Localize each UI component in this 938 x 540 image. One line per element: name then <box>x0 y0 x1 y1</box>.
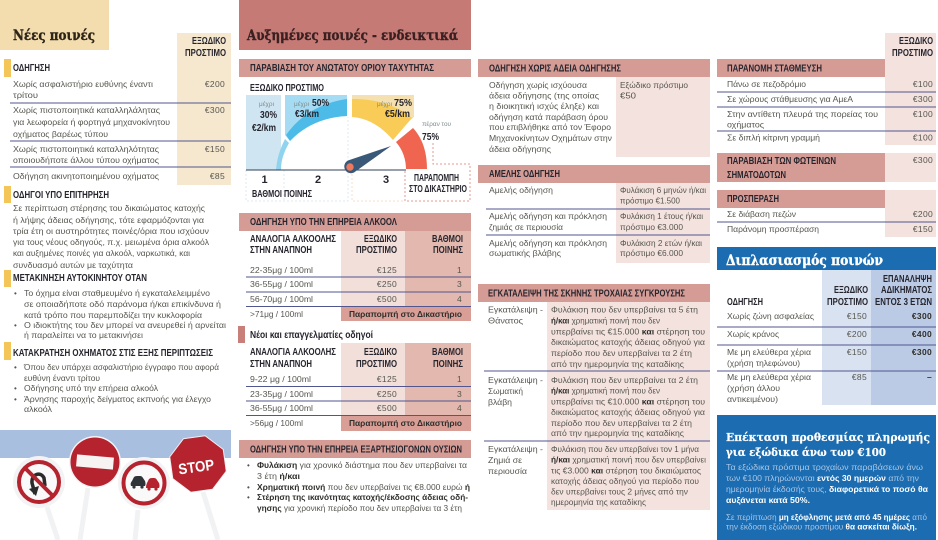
panel: leaving the scene of a collision: βλάβη <box>488 398 512 407</box>
section: driving: €300 <box>205 105 225 115</box>
table: alcohol penalties: ΠΡΟΣΤΙΜΟ <box>356 245 397 256</box>
table: repeat offences: αντικειμένου) <box>727 395 778 404</box>
icon: stop sign <box>168 434 228 494</box>
table: alcohol penalties: €500 <box>377 294 397 304</box>
panel: careless driving: ζημιάς σε περιουσία <box>489 223 563 232</box>
section: driving: €150 <box>205 144 225 154</box>
section: driving: ΟΔΗΓΗΣΗ <box>13 63 50 74</box>
chart: speed gauge: 2 <box>315 174 321 186</box>
text block: drug penalties: Φυλάκιση για χρονικό διάστημα που δεν υπερβαίνει τα <box>257 461 467 470</box>
chart: speed gauge: 1 <box>261 174 268 186</box>
panel: illegal parking, traffic lights, overtaking: ΣΗΜΑΤΟΔΟΤΩΝ <box>727 170 786 181</box>
text block: drug penalties: Στέρηση της ικανότητας κατοχής/έκδοσης άδειας οδή- <box>257 493 468 502</box>
table: alcohol penalties: ΣΤΗΝ ΑΝΑΠΝΟΗ <box>250 245 312 256</box>
chart: speed gauge: ΠΑΡΑΠΟΜΠΗ <box>414 173 459 184</box>
icon: no overtaking sign <box>118 457 170 509</box>
table: repeat offences <box>717 270 936 405</box>
panel: driving without licence: άδεια οδήγησης (της οποίας <box>489 92 599 100</box>
text block: drug penalties: γησης για χρονική περίοδο που δεν υπερβαίνει τα 3 έτη <box>257 504 462 513</box>
table: alcohol penalties: 56-70μg / 100ml <box>250 295 313 304</box>
panel: leaving the scene of a collision: Θάνατος <box>488 316 523 326</box>
icon: no U-turn sign <box>13 456 65 508</box>
callout: payment deadline extension: Επέκταση προθεσμίας πληρωμής <box>726 430 930 444</box>
table: repeat offences: Με μη ελεύθερα χέρια <box>727 348 811 357</box>
section: vehicle impoundment: αλκοόλ <box>24 405 52 414</box>
panel: driving without licence: άδεια οδήγησης <box>489 145 551 154</box>
panel: careless driving: ΑΜΕΛΗΣ ΟΔΗΓΗΣΗ <box>489 169 560 180</box>
title: new penalties: Νέες ποινές <box>13 28 95 44</box>
panel: illegal parking, traffic lights, overtaking: ΠΑΡΑΒΙΑΣΗ ΤΩΝ ΦΩΤΕΙΝΩΝ <box>727 156 836 167</box>
text block: drug penalties: • <box>247 461 250 470</box>
heading: driving under alcohol <box>239 213 471 231</box>
chart: speed gauge <box>246 83 470 201</box>
callout: payment deadline extension: ημερομηνία έκδοσής τους, διαφορετικά το ποσό θα <box>726 485 928 494</box>
chart: speed gauge: €2/km <box>252 123 276 134</box>
table: repeat offences: ΟΔΗΓΗΣΗ <box>727 297 763 308</box>
table: alcohol penalties for new drivers: 36-55μg / 100ml <box>250 404 313 413</box>
section: vehicle removal: Ο ιδιοκτήτης του δεν μπορεί να ανευρεθεί ή αρνείται <box>24 321 226 330</box>
table: alcohol penalties: €125 <box>377 265 397 275</box>
table: alcohol penalties for new drivers: 9-22 μg / 100ml <box>250 375 311 384</box>
panel: leaving the scene of a collision <box>478 284 710 510</box>
chart: speed gauge: πέραν του <box>422 120 451 128</box>
panel: careless driving: πρόστιμο €1.500 <box>620 196 681 206</box>
chart: speed gauge: 75% <box>422 132 439 143</box>
chart: speed gauge: €3/km <box>295 109 319 120</box>
panel: leaving the scene of a collision: δικαιώματος κατοχής άδειας οδηγού για <box>551 408 705 417</box>
heading: driving under drugs: ΟΔΗΓΗΣΗ ΥΠΟ ΤΗΝ ΕΠΗΡΕΙΑ ΕΞΑΡΤΗΣΙΟΓΟΝΩΝ ΟΥΣΙΩΝ <box>250 444 462 456</box>
panel: leaving the scene of a collision: από την ημερομηνία της καταδίκης <box>551 429 684 438</box>
panel: driving without licence: η διοικητική ισχύς έληξε) και <box>489 102 599 111</box>
panel: doubling of penalties <box>717 247 936 405</box>
icon: no entry sign <box>69 436 121 488</box>
panel: careless driving: Φυλάκιση 1 έτους ή/και <box>620 212 703 221</box>
panel: driving without licence: οδήγηση κατά παράβαση όρου <box>489 113 608 122</box>
section: vehicle removal: • <box>14 289 17 298</box>
callout: payment deadline extension: των €100 πληρώνονται εντός 30 ημερών από την <box>726 474 919 483</box>
title: increased penalties: Αυξημένες ποινές - ενδεικτικά <box>246 28 458 44</box>
illustration: road signs <box>0 430 231 540</box>
panel: careless driving: Φυλάκιση 6 μηνών ή/και <box>620 186 706 195</box>
text block: drug penalties: • <box>247 483 250 492</box>
table: alcohol penalties for new drivers: >56μg / 100ml <box>250 419 303 428</box>
panel: careless driving <box>478 165 710 263</box>
section: vehicle impoundment: • <box>14 384 17 393</box>
heading: new and professional drivers: Νέοι και επαγγελματίες οδηγοί <box>250 330 373 341</box>
panel: leaving the scene of a collision: Φυλάκιση που δεν υπερβαίνει τα 2 έτη <box>551 376 698 385</box>
section: driving: Χωρίς ασφαλιστήριο ευθύνης έναντι <box>13 80 153 89</box>
panel: driving without licence <box>478 59 710 157</box>
chart: speed gauge: €5/km <box>385 109 410 120</box>
panel: leaving the scene of a collision: υπερβαίνει τις €15.000 και στέρηση του <box>551 328 705 336</box>
panel: illegal parking, traffic lights, overtaking: Σε χώρους στάθμευσης για ΑμεΑ <box>727 95 854 104</box>
title: doubling of penalties <box>717 247 936 270</box>
section: vehicle impoundment: • <box>14 363 17 372</box>
table: repeat offences: (χρήση τηλεφώνου) <box>727 359 800 368</box>
panel: illegal parking, traffic lights, overtaking: ΠΑΡΑΝΟΜΗ ΣΤΑΘΜΕΥΣΗ <box>727 64 822 74</box>
section: driving: Οδήγηση ακινητοποιημένου οχήματος <box>13 172 159 181</box>
table: repeat offences: €400 <box>912 329 932 339</box>
panel: illegal parking, traffic lights, overtaking <box>717 33 936 237</box>
table: alcohol penalties: ΕΞΩΔΙΚΟ <box>364 234 397 245</box>
callout: payment deadline extension: για εξώδικα άνω των €100 <box>726 445 886 459</box>
panel: leaving the scene of a collision: τις €3.000 και στέρηση του δικαιώματος <box>551 466 701 476</box>
heading: speed limit violation: ΠΑΡΑΒΙΑΣΗ ΤΟΥ ΑΝΩΤΑΤΟΥ ΟΡΙΟΥ ΤΑΧΥΤΗΤΑΣ <box>250 63 434 74</box>
section: supervised drivers: τρία έτη οι αυστηρότητες ποινές/όρια που ισχύουν <box>13 227 209 236</box>
chart: speed gauge: μέχρι <box>259 100 275 108</box>
table: repeat offences: ΕΞΩΔΙΚΟ <box>834 285 868 296</box>
table: repeat offences: €150 <box>847 311 867 321</box>
panel: leaving the scene of a collision: Εγκατάλειψη - <box>488 445 543 454</box>
table: repeat offences: – <box>927 372 932 382</box>
panel: leaving the scene of a collision: περίοδο που δεν υπερβαίνει τα 2 έτη <box>551 349 692 358</box>
table: repeat offences: €85 <box>852 372 867 382</box>
panel: leaving the scene of a collision: Εγκατάλειψη - <box>488 306 543 314</box>
text block: drug penalties: 3 έτη ή/και <box>257 472 300 481</box>
section: supervised drivers: ΟΔΗΓΟΙ ΥΠΟ ΕΠΙΤΗΡΗΣΗ <box>13 190 109 201</box>
fine column: ΠΡΟΣΤΙΜΟ <box>185 48 226 59</box>
text block: drug penalties: Χρηματική ποινή που δεν υπερβαίνει τις €8.000 ευρώ ή <box>257 483 470 492</box>
table: alcohol penalties for new drivers: 4 <box>457 403 462 413</box>
table: repeat offences: Χωρίς ζώνη ασφαλείας <box>727 312 814 321</box>
callout: payment deadline extension: αυξάνεται κατά 50%. <box>726 496 810 505</box>
section: driving: για λεωφορεία ή φορτηγά μηχανοκίνητου <box>13 118 170 127</box>
table: alcohol penalties for new drivers: 3 <box>457 389 462 399</box>
title: doubling of penalties: Διπλασιασμός ποινών <box>726 253 883 269</box>
panel: illegal parking, traffic lights, overtaking: Σε διπλή κίτρινη γραμμή <box>727 134 820 142</box>
section: driving: Χωρίς πιστοποιητικά καταλληλότητας <box>13 145 159 154</box>
table: repeat offences: €300 <box>912 311 932 321</box>
section: vehicle removal <box>4 270 226 340</box>
chart: speed gauge: μέχρι <box>377 100 393 108</box>
title: increased penalties <box>239 0 471 50</box>
panel: careless driving: Φυλάκιση 2 ετών ή/και <box>620 239 702 248</box>
chart: speed gauge: 75% <box>394 98 412 109</box>
table: alcohol penalties: ΒΑΘΜΟΙ <box>432 234 463 245</box>
table: alcohol penalties: 3 <box>457 279 462 289</box>
title: new penalties <box>0 0 109 50</box>
section: driving <box>4 59 231 181</box>
panel: illegal parking, traffic lights, overtaking: €100 <box>913 79 933 89</box>
table: repeat offences: €300 <box>912 347 932 357</box>
panel: leaving the scene of a collision: Εγκατάλειψη - <box>488 376 543 385</box>
chart: speed gauge: 30% <box>260 110 277 121</box>
table: alcohol penalties: 36-55μg / 100ml <box>250 280 313 289</box>
table: alcohol penalties: Παραπομπή στο Δικαστήριο <box>349 310 462 319</box>
text block: drug penalties <box>247 461 470 513</box>
section: driving: Χωρίς πιστοποιητικά καταλληλάλητας <box>13 106 160 115</box>
section: supervised drivers: για τους νέους οδηγούς, π.χ. μειωμένα όρια αλκοόλ <box>13 238 209 247</box>
panel: leaving the scene of a collision: ή/και χρηματική ποινή που δεν υπερβαίνει <box>551 456 706 464</box>
table: alcohol penalties: >71μg / 100ml <box>250 310 303 319</box>
text block: drug penalties: • <box>247 493 250 502</box>
table: alcohol penalties: ΠΟΙΝΗΣ <box>433 245 463 256</box>
panel: leaving the scene of a collision: Σωματική <box>488 387 523 396</box>
panel: leaving the scene of a collision: περίοδο που δεν υπερβαίνει τα 2 έτη <box>551 419 692 428</box>
chart: speed gauge: 3 <box>383 174 389 186</box>
panel: careless driving: Αμελής οδήγηση <box>489 186 553 195</box>
section: vehicle impoundment: Άρνησης παροχής δείγματος εκπνοής για έλεγχο <box>24 395 212 404</box>
table: alcohol penalties for new drivers: ΒΑΘΜΟΙ <box>432 347 463 358</box>
heading: driving under drugs <box>239 440 471 458</box>
table: alcohol penalties for new drivers: €125 <box>377 374 397 384</box>
panel: increased penalties <box>238 0 471 513</box>
panel: careless driving: πρόστιμο €3.000 <box>620 223 684 232</box>
table: alcohol penalties <box>246 231 471 321</box>
section: vehicle removal: κατά τρόπο που παρεμποδίζει την κυκλοφορία <box>24 311 202 320</box>
callout: payment deadline extension: την έκδοση εξώδικου προστίμου θα ασκείται δίωξη. <box>726 522 917 532</box>
heading: new and professional drivers <box>238 326 373 343</box>
panel: leaving the scene of a collision: ή/και χρηματική ποινή που δεν <box>551 316 660 326</box>
table: alcohol penalties for new drivers: ΠΟΙΝΗΣ <box>433 359 463 370</box>
panel: leaving the scene of a collision: περιουσία <box>488 467 527 476</box>
table: alcohol penalties: 22-35μg / 100ml <box>250 266 313 275</box>
panel: leaving the scene of a collision: δικαιώματος κατοχής άδειας οδηγού για <box>551 338 705 347</box>
panel: illegal parking, traffic lights, overtaking: Παράνομη προσπέραση <box>727 225 819 234</box>
panel: illegal parking, traffic lights, overtaking: €200 <box>913 209 933 219</box>
table: repeat offences: Χωρίς κράνος <box>727 330 779 339</box>
section: vehicle impoundment: ΚΑΤΑΚΡΑΤΗΣΗ ΟΧΗΜΑΤΟΣ ΣΤΙΣ ΕΞΗΣ ΠΕΡΙΠΤΩΣΕΙΣ <box>13 348 213 359</box>
callout: payment deadline extension: Σε περίπτωση μη εξόφλησης μετά από 45 ημέρες από <box>726 513 928 522</box>
panel: careless driving: Αμελής οδήγηση και πρόκληση <box>489 239 607 248</box>
section: supervised drivers: συνδυασμό αυτών με ταχύτητα <box>13 261 133 270</box>
panel: careless driving: σωματικής βλάβης <box>489 249 561 258</box>
table: alcohol penalties for new drivers: €500 <box>377 403 397 413</box>
section: driving: οχήματος βαρέως τύπου <box>13 130 108 139</box>
heading: speed limit violation <box>239 59 471 77</box>
chart: speed gauge: 50% <box>312 98 329 109</box>
panel: illegal parking, traffic lights, overtaking: €300 <box>913 155 933 165</box>
table: repeat offences: ΠΡΟΣΤΙΜΟ <box>827 297 868 308</box>
section: driving: €85 <box>210 171 225 181</box>
section: supervised drivers: και αυξημένες ποινές για αλκοόλ, ναρκωτικά, και <box>13 249 190 258</box>
panel: illegal parking, traffic lights, overtaking: ΠΡΟΣΠΕΡΑΣΗ <box>727 194 779 205</box>
panel: illegal parking, traffic lights, overtaking: €100 <box>913 132 933 142</box>
fine column <box>177 33 231 185</box>
table: alcohol penalties for new drivers: ΣΤΗΝ ΑΝΑΠΝΟΗ <box>250 359 312 370</box>
section: vehicle impoundment: ευθύνη έναντι τρίτου <box>24 374 100 383</box>
panel: driving without licence: Εξώδικο πρόστιμο <box>620 81 689 90</box>
panel: illegal parking, traffic lights, overtaking: οχήματος <box>727 120 764 130</box>
table: repeat offences: €200 <box>847 329 867 339</box>
callout: payment deadline extension <box>717 415 936 540</box>
panel: illegal parking, traffic lights, overtaking: €100 <box>913 109 933 119</box>
section: vehicle removal: Το όχημα είναι σταθμευμένο ή εγκαταλελειμμένο <box>24 289 211 298</box>
panel: driving without licence: Οδήγηση χωρίς ισχύουσα <box>489 81 587 90</box>
panel: driving without licence: €50 <box>620 92 637 100</box>
panel: leaving the scene of a collision: δεν υπερβαίνει τους 2 μήνες από την <box>551 488 688 496</box>
panel: leaving the scene of a collision: ΕΓΚΑΤΑΛΕΙΨΗ ΤΗΣ ΣΚΗΝΗΣ ΤΡΟΧΑΙΑΣ ΣΥΓΚΡΟΥΣΗΣ <box>488 288 685 300</box>
panel: driving without licence: ΟΔΗΓΗΣΗ ΧΩΡΙΣ ΑΔΕΙΑ ΟΔΗΓΗΣΗΣ <box>489 64 621 74</box>
table: alcohol penalties for new drivers: ΑΝΑΛΟΓΙΑ ΑΛΚΟΟΛΗΣ <box>250 347 336 358</box>
panel: illegal parking, traffic lights, overtaking: €150 <box>913 224 933 234</box>
panel: leaving the scene of a collision: υπερβαίνει τις €10.000 και στέρηση του <box>551 398 705 406</box>
section: vehicle removal: ΜΕΤΑΚΙΝΗΣΗ ΑΥΤΟΚΙΝΗΤΟΥ ΟΤΑΝ <box>13 273 147 284</box>
panel: leaving the scene of a collision: Φυλάκιση που δεν υπερβαίνει τα 5 έτη <box>551 306 698 314</box>
table: alcohol penalties: ΑΝΑΛΟΓΙΑ ΑΛΚΟΟΛΗΣ <box>250 234 336 245</box>
panel: driving without licence: Μηχανοκίνητων Οχημάτων στην <box>489 134 612 143</box>
panel: illegal parking, traffic lights, overtaking: Στην αντίθετη πλευρά της πορείας του <box>727 110 878 119</box>
section: vehicle impoundment <box>4 342 219 414</box>
section: driving: €200 <box>205 79 225 89</box>
section: vehicle removal: σε οποιαδήποτε οδό παράνομα ή/και επικίνδυνα ή <box>24 300 221 309</box>
panel: illegal parking, traffic lights, overtaking: Πάνω σε πεζοδρόμιο <box>727 80 807 89</box>
section: supervised drivers <box>4 186 209 270</box>
section: vehicle impoundment: Όπου δεν υπάρχει ασφαλιστήριο έγγραφο που αφορά <box>23 363 219 372</box>
table: alcohol penalties for new drivers: ΕΞΩΔΙΚΟ <box>364 347 397 358</box>
panel: illegal parking, traffic lights, overtaking: €300 <box>913 94 933 104</box>
chart: speed gauge: ΒΑΘΜΟΙ ΠΟΙΝΗΣ <box>252 189 312 200</box>
section: driving: τρίτου <box>13 91 38 100</box>
panel: leaving the scene of a collision: κατοχής άδειας οδηγού για περίοδο που <box>551 477 699 486</box>
table: alcohol penalties: 1 <box>457 265 462 275</box>
section: vehicle impoundment: • <box>14 395 17 404</box>
panel: leaving the scene of a collision: από την ημερομηνία της καταδίκης <box>551 360 684 369</box>
section: supervised drivers: Σε περίπτωση στέρησης του δικαιώματος κατοχής <box>13 204 205 213</box>
panel: leaving the scene of a collision: ημερομηνία της καταδίκης <box>551 498 646 507</box>
table: repeat offences: (χρήση άλλου <box>727 384 780 393</box>
chart: speed gauge: ΕΞΩΔΙΚΟ ΠΡΟΣΤΙΜΟ <box>250 83 324 94</box>
section: vehicle removal: ή παραλείπει να το μετακινήσει <box>24 331 143 340</box>
table: alcohol penalties: 4 <box>457 294 462 304</box>
fine column: ΕΞΩΔΙΚΟ <box>192 36 226 47</box>
panel: illegal parking, traffic lights, overtaking: Σε διάβαση πεζών <box>727 210 796 219</box>
table: alcohol penalties for new drivers: 1 <box>457 374 462 384</box>
table: alcohol penalties for new drivers: ΠΡΟΣΤΙΜΟ <box>356 359 397 370</box>
panel: careless driving: Αμελής οδήγηση και πρόκληση <box>489 212 607 221</box>
section: vehicle impoundment: Οδήγησης υπό την επήρεια αλκοόλ <box>24 384 158 393</box>
table: repeat offences: Με μη ελεύθερα χέρια <box>727 373 811 382</box>
section: driving: οποιουδήποτε άλλου τύπου οχήματος <box>13 156 159 165</box>
table: alcohol penalties for new drivers: €250 <box>377 389 397 399</box>
panel: driving without licence: που επιβλήθηκε από τον Έφορο <box>489 123 612 132</box>
panel: leaving the scene of a collision: Ζημιά σε <box>488 456 522 465</box>
table: alcohol penalties for new drivers <box>246 343 471 431</box>
table: alcohol penalties: €250 <box>377 279 397 289</box>
table: alcohol penalties for new drivers: Παραπομπή στο Δικαστήριο <box>349 419 462 428</box>
table: repeat offences: €150 <box>847 347 867 357</box>
panel: leaving the scene of a collision: Φυλάκιση που δεν υπερβαίνει τον 1 μήνα <box>551 445 699 454</box>
panel: leaving the scene of a collision: ή/και χρηματική ποινή που δεν <box>551 386 660 396</box>
chart: speed gauge: μέχρι <box>294 100 310 108</box>
heading: driving under alcohol: ΟΔΗΓΗΣΗ ΥΠΟ ΤΗΝ ΕΠΗΡΕΙΑ ΑΛΚΟΟΛ <box>250 217 397 228</box>
section: supervised drivers: ή λήψης άδειας οδήγησης, τότε εφαρμόζονται για <box>13 216 204 225</box>
table: alcohol penalties for new drivers: 23-35μg / 100ml <box>250 390 313 399</box>
icon: stop sign: STOP <box>177 457 215 478</box>
section: vehicle removal: • <box>14 321 17 330</box>
chart: speed gauge: ΣΤΟ ΔΙΚΑΣΤΗΡΙΟ <box>409 184 467 195</box>
panel: careless driving: πρόστιμο €6.000 <box>620 249 684 258</box>
panel: new penalties <box>0 0 231 540</box>
callout: payment deadline extension: Τα εξώδικα πρόστιμα τροχαίων παραβάσεων άνω <box>726 463 923 472</box>
